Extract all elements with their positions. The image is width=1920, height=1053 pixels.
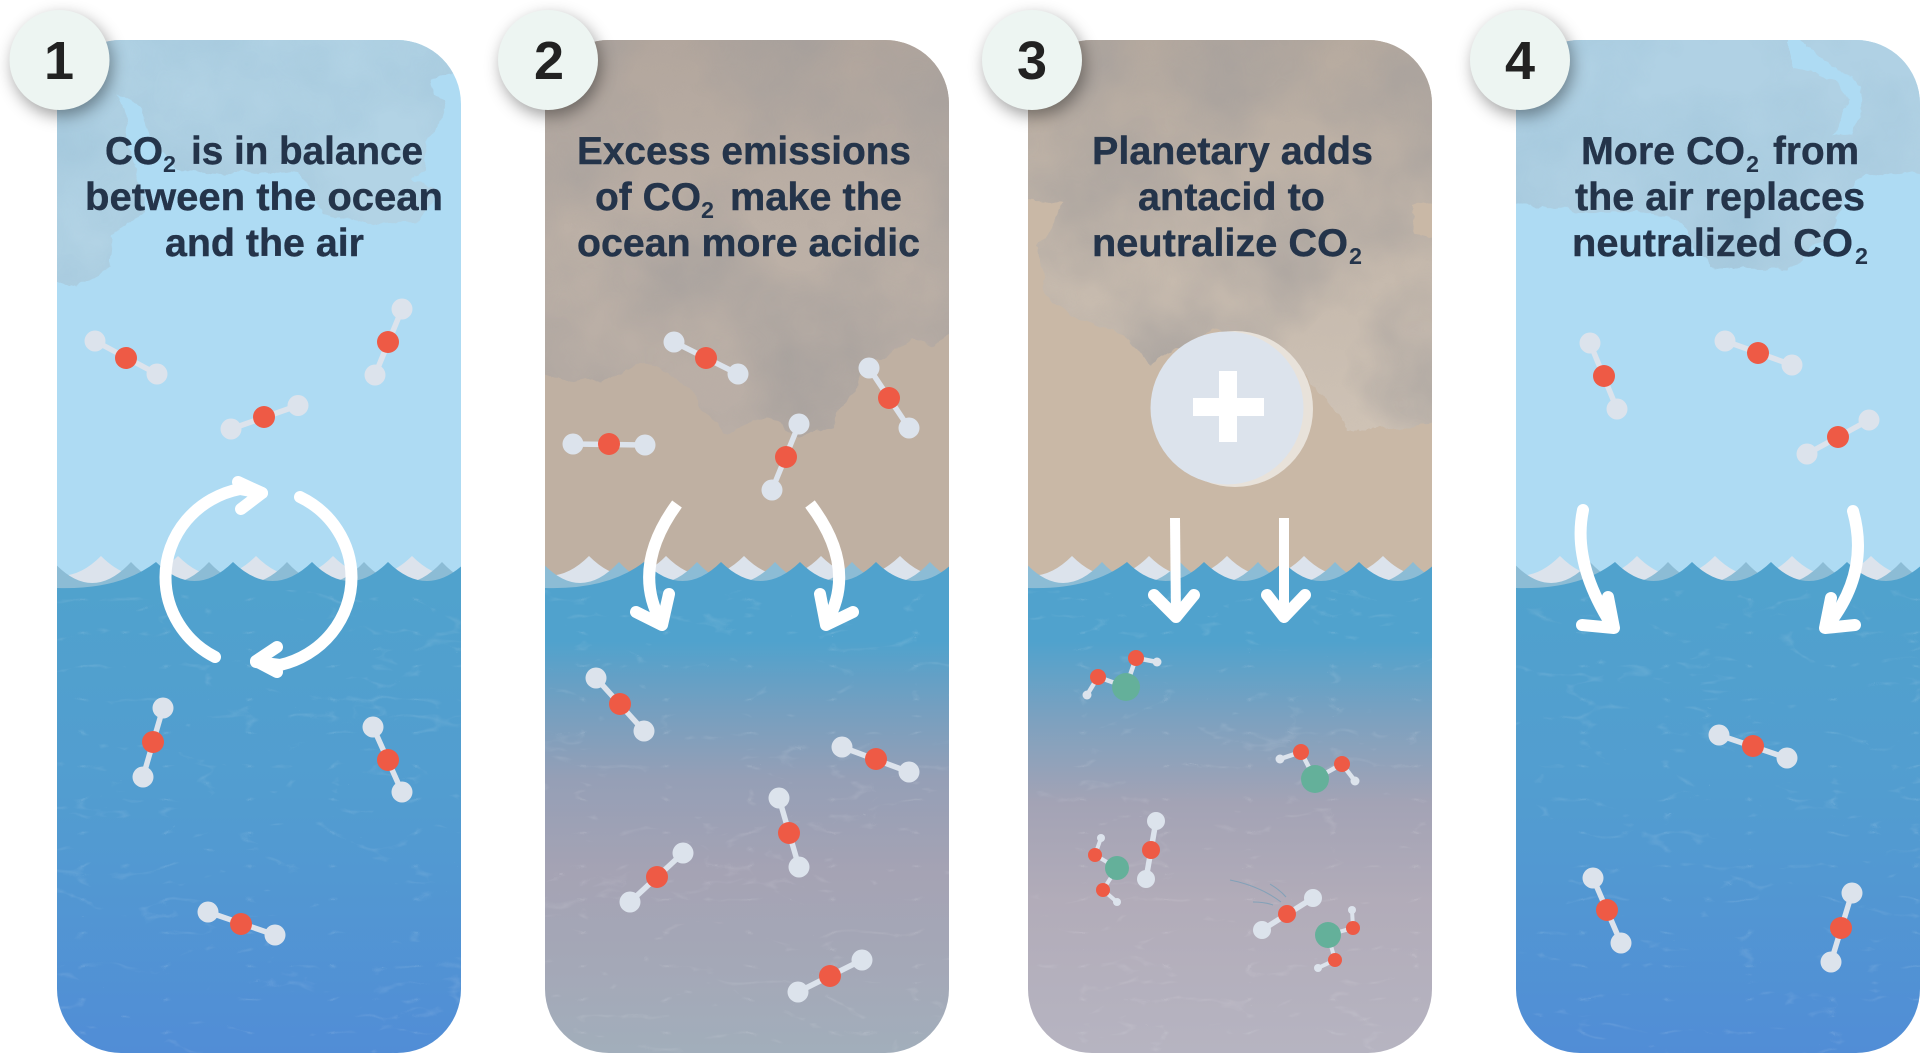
heading 3 <box>1092 130 1373 269</box>
CO2 molecule: air, top right <box>364 298 412 386</box>
arrow: right, into ocean <box>810 504 853 625</box>
heading 1: is in balance <box>191 130 423 173</box>
heading 2 <box>577 130 920 265</box>
CO2 molecule: water <box>1582 868 1632 954</box>
panel 2: excess emissions <box>545 40 949 1053</box>
CO2 molecule: air <box>1796 410 1880 464</box>
heading 4 <box>1572 130 1868 269</box>
CO2 molecule: air <box>1580 332 1628 420</box>
panel 1: CO2 in balance <box>57 40 461 1053</box>
panel 1 background: sky, clouds, waves, water <box>57 40 461 1053</box>
CO2 molecule: water <box>832 736 920 782</box>
badge 1: 1 <box>44 31 74 91</box>
heading 4: 2 <box>1746 151 1759 177</box>
heading 4: neutralized CO <box>1572 222 1853 265</box>
badge 4 <box>1470 10 1570 110</box>
CO2 molecule: air <box>562 433 656 456</box>
CO2 molecule: air, top left <box>84 330 168 384</box>
heading 4: from <box>1773 130 1859 173</box>
CO2 molecule: water, left <box>132 698 174 788</box>
CO2 molecule: air, centre <box>220 395 308 440</box>
arrow: left, into ocean <box>636 504 677 625</box>
heading 1 <box>85 130 443 265</box>
badge 2: 2 <box>534 31 564 91</box>
badge 3 <box>982 10 1082 110</box>
CO2 molecule: water <box>586 668 654 742</box>
CO2 molecule: water, right <box>362 716 412 802</box>
arrow: down, right <box>1267 518 1305 618</box>
arrow: right, into ocean <box>1825 511 1858 628</box>
heading 3: Planetary adds <box>1092 130 1373 173</box>
neutralized molecule: right <box>1276 744 1360 793</box>
heading 2: ocean more acidic <box>577 222 920 265</box>
heading 1: and the air <box>165 222 364 265</box>
panel 4 background: sky, clouds, waves, water <box>1516 40 1920 1053</box>
badge 2 <box>498 10 598 110</box>
CO2 molecule: water <box>768 788 810 878</box>
badge 1 <box>10 10 110 110</box>
arrows: balance cycle <box>165 482 352 672</box>
CO2 molecule: lower left <box>1137 812 1165 888</box>
heading 3: neutralize CO <box>1092 222 1348 265</box>
panel 3 background: sky, clouds, waves, water <box>1028 40 1432 1053</box>
heading 2: 2 <box>701 197 714 223</box>
CO2 molecule: air <box>762 414 810 500</box>
CO2 molecule: water <box>620 842 694 912</box>
neutralized molecule: lower left <box>1088 834 1129 906</box>
neutralized molecule: top left <box>1082 650 1162 701</box>
CO2 molecule: water <box>1708 724 1798 768</box>
CO2 molecule: lower right with motion streaks <box>1230 880 1322 939</box>
neutralized molecule: lower right <box>1314 906 1360 972</box>
arrow: left, into ocean <box>1581 510 1614 628</box>
CO2 molecule: water, bottom <box>198 902 286 946</box>
heading 3: antacid to <box>1138 176 1325 219</box>
heading 1: 2 <box>163 151 176 177</box>
heading 2: make the <box>730 176 902 219</box>
heading 4: 2 <box>1855 243 1868 269</box>
panel 3: antacid <box>1028 40 1432 1053</box>
antacid tablet with plus <box>1150 331 1313 487</box>
heading 4: the air replaces <box>1575 176 1865 219</box>
heading 2: Excess emissions <box>577 130 911 173</box>
arrow: down, left <box>1154 518 1194 618</box>
CO2 molecule: water <box>1820 882 1862 972</box>
CO2 molecule: water <box>788 950 872 1002</box>
CO2 molecule: air <box>1714 330 1802 376</box>
CO2 molecule: air <box>664 332 748 384</box>
heading 3: 2 <box>1349 243 1362 269</box>
CO2 molecule: air <box>858 358 920 438</box>
panel 2 background: sky, clouds, waves, water <box>545 40 949 1053</box>
badge 4: 4 <box>1505 31 1535 91</box>
heading 2: of CO <box>595 176 701 219</box>
heading 1: CO <box>105 130 163 173</box>
heading 4: More CO <box>1581 130 1745 173</box>
badge 3: 3 <box>1017 31 1047 91</box>
heading 1: between the ocean <box>85 176 443 219</box>
panel 4: replacement CO2 <box>1516 40 1920 1053</box>
